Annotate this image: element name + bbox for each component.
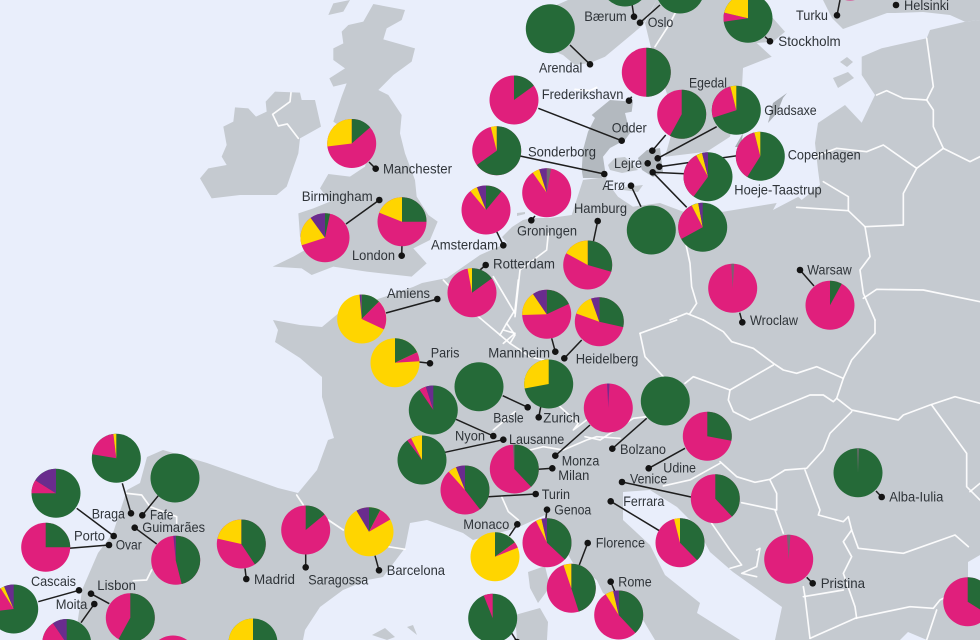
city: Ovar bbox=[21, 523, 142, 572]
city: Turin: Turin bbox=[542, 486, 570, 502]
city: Hamburg bbox=[563, 200, 627, 290]
city: Alba-Iulia: Alba-Iulia bbox=[889, 489, 943, 505]
city: Amsterdam bbox=[431, 186, 510, 252]
sea: Black Sea bbox=[968, 555, 980, 610]
city: Rotterdam: Rotterdam bbox=[493, 256, 555, 272]
city: Odder: Odder bbox=[612, 120, 647, 136]
city: Rotterdam bbox=[448, 256, 555, 317]
pie and leader: dot at Zealand bbox=[649, 169, 727, 252]
city: Paris bbox=[370, 338, 459, 387]
city: Fafe bbox=[139, 454, 200, 522]
city: Saragossa: Saragossa bbox=[308, 572, 368, 588]
city: Madrid bbox=[217, 520, 295, 587]
city: Cascais bbox=[0, 573, 82, 634]
city: Stockholm bbox=[724, 0, 841, 49]
city: Arendal: Arendal bbox=[539, 60, 582, 76]
city: Rome: Rome bbox=[618, 574, 652, 590]
city: Ferrara: Ferrara bbox=[623, 493, 664, 509]
city: Wroclaw bbox=[708, 264, 799, 328]
city: Alba-Iulia bbox=[834, 448, 943, 505]
city: Bolzano bbox=[609, 376, 690, 457]
city: Monaco bbox=[463, 516, 521, 581]
city: Cascais: Cascais bbox=[31, 573, 76, 589]
city: Hamburg: Hamburg bbox=[574, 200, 627, 216]
city: Turku: Turku bbox=[796, 7, 828, 23]
city: Sonderborg: Sonderborg bbox=[528, 144, 596, 160]
city: Lejre: Lejre bbox=[614, 155, 642, 171]
city: Monaco: Monaco bbox=[463, 516, 509, 532]
sea: Adriatic bbox=[623, 490, 782, 640]
city: Barcelona bbox=[344, 507, 445, 578]
city: Florence bbox=[547, 534, 645, 613]
landmass: Denmark bbox=[582, 93, 787, 178]
city: Heidelberg: Heidelberg bbox=[576, 350, 638, 366]
city: Milan bbox=[490, 444, 589, 494]
landmass: Scandinavia and Finland bbox=[372, 0, 980, 640]
city: Zurich: Zurich bbox=[543, 410, 580, 426]
city: Florence: Florence bbox=[596, 534, 645, 550]
city: Monza bbox=[552, 384, 633, 469]
city: Nyon bbox=[409, 386, 497, 444]
city: Lisbon: Lisbon bbox=[97, 577, 136, 593]
city: Venice: Venice bbox=[630, 470, 667, 486]
city: Venice bbox=[619, 470, 740, 523]
city: Bærum: Bærum bbox=[584, 8, 627, 24]
city: Porto: Porto bbox=[74, 527, 105, 543]
city: Groningen: Groningen bbox=[517, 223, 577, 239]
city: Mannheim: Mannheim bbox=[488, 344, 550, 360]
city: Moita bbox=[42, 596, 98, 640]
city: Pristina bbox=[764, 535, 865, 591]
city: Lisbon bbox=[88, 577, 155, 640]
city: Braga bbox=[92, 434, 141, 521]
city: Amsterdam: Amsterdam bbox=[431, 236, 498, 252]
city: Manchester bbox=[327, 119, 452, 176]
city: Gladsaxe: Gladsaxe bbox=[764, 102, 817, 118]
city: Rome bbox=[594, 574, 652, 640]
city: Fafe: Fafe bbox=[150, 506, 173, 522]
city: Hoeje-Taastrup bbox=[653, 152, 822, 201]
city: Barcelona: Barcelona bbox=[387, 562, 445, 578]
city: Basle bbox=[454, 362, 531, 426]
city: Frederikshavn: Frederikshavn bbox=[542, 86, 623, 102]
city: Saragossa bbox=[281, 506, 368, 588]
city: Bærum bbox=[584, 0, 650, 24]
city: Warsaw bbox=[797, 261, 854, 330]
city: Madrid: Madrid bbox=[254, 571, 295, 587]
city: Porto bbox=[32, 469, 117, 543]
city: Egedal: Egedal bbox=[689, 74, 727, 90]
city: Monza: Monza bbox=[562, 453, 599, 469]
city: Zurich bbox=[524, 360, 580, 426]
city: Ærø: Ærø bbox=[602, 177, 625, 193]
city: Frederikshavn bbox=[542, 48, 671, 104]
pie: south-east edge bbox=[943, 577, 980, 626]
city: Egedal bbox=[649, 74, 727, 154]
city: Hoeje-Taastrup: Hoeje-Taastrup bbox=[734, 181, 822, 197]
city: Manchester: Manchester bbox=[383, 160, 452, 176]
city: Odder bbox=[490, 76, 647, 144]
landmass: Great Britain bbox=[273, 0, 438, 277]
city: Ferrara bbox=[607, 493, 704, 567]
city: Genoa bbox=[522, 501, 591, 567]
city: Birmingham: Birmingham bbox=[302, 188, 373, 204]
city: Turku bbox=[796, 0, 874, 23]
landmass: Ireland bbox=[200, 92, 321, 198]
city: Mannheim bbox=[488, 290, 571, 360]
city: Copenhagen bbox=[656, 132, 861, 181]
pie: southern Spain, pink top bbox=[148, 636, 198, 640]
city: Copenhagen: Copenhagen bbox=[788, 146, 861, 162]
city: London bbox=[352, 197, 426, 263]
city: Udine: Udine bbox=[663, 460, 696, 476]
city: Gladsaxe bbox=[654, 86, 817, 162]
city: Lausanne bbox=[398, 431, 564, 484]
city: Ærø bbox=[602, 177, 676, 254]
city: Guimarães: Guimarães bbox=[142, 519, 205, 535]
city: Basle: Basle bbox=[493, 410, 524, 426]
city: Stockholm: Stockholm bbox=[778, 33, 841, 49]
city: Genoa: Genoa bbox=[554, 501, 591, 517]
city: Wroclaw: Wroclaw bbox=[750, 312, 799, 328]
city: Milan: Milan bbox=[558, 467, 589, 483]
city: Oristano bbox=[468, 594, 573, 640]
city: Oslo: Oslo bbox=[648, 14, 673, 30]
city: Sonderborg bbox=[472, 126, 608, 177]
city: Ovar: Ovar bbox=[116, 537, 142, 553]
city: Moita: Moita bbox=[56, 596, 87, 612]
pie: southern Spain, green and yellow bbox=[228, 618, 278, 640]
city: London: London bbox=[352, 247, 395, 263]
city: Oslo bbox=[637, 0, 704, 30]
city: Amiens bbox=[337, 285, 441, 344]
city: Nyon: Nyon bbox=[455, 428, 485, 444]
city: Warsaw: Warsaw bbox=[807, 261, 852, 277]
city: Bolzano: Bolzano bbox=[620, 441, 666, 457]
city: Arendal bbox=[526, 4, 593, 76]
city: Paris: Paris bbox=[431, 344, 459, 360]
city: Amiens: Amiens bbox=[387, 285, 430, 301]
city: Heidelberg bbox=[561, 297, 638, 366]
city: Pristina: Pristina bbox=[821, 575, 865, 591]
city: Turin bbox=[440, 466, 570, 514]
city: Guimarães bbox=[131, 519, 205, 585]
city: Birmingham bbox=[300, 188, 383, 262]
city: Braga: Braga bbox=[92, 505, 125, 521]
city: Groningen bbox=[517, 168, 577, 239]
city: Udine bbox=[645, 412, 732, 476]
city: Lausanne: Lausanne bbox=[509, 431, 564, 447]
sea: Aegean bbox=[900, 632, 927, 640]
